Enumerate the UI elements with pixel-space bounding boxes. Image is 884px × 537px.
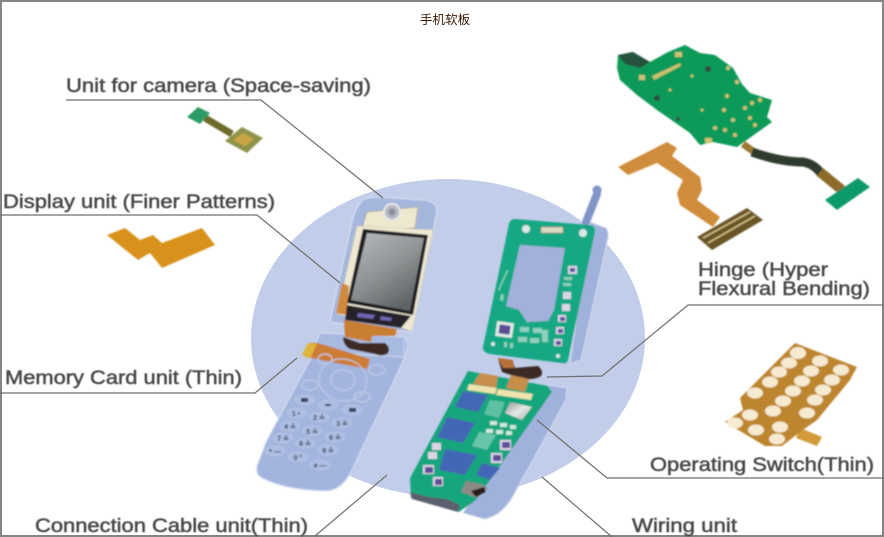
phone top housing	[330, 197, 437, 332]
small purple components	[423, 440, 511, 486]
LCD driver	[345, 305, 411, 328]
photo: orange hinge flex	[618, 142, 763, 250]
product photos	[107, 45, 870, 446]
board pads	[498, 270, 572, 348]
board connector	[541, 227, 563, 233]
memory card flex	[302, 343, 370, 369]
blue chips	[437, 391, 500, 480]
photo: camera flex	[187, 107, 263, 153]
keypad keys: 9 ≟	[322, 446, 334, 455]
hinge covers	[312, 333, 405, 357]
board screw holes	[491, 225, 587, 358]
label: display: Display unit (Finer Patterns)	[3, 192, 275, 213]
keypad keys: 5 ≟	[306, 427, 318, 436]
keypad keys: 8 ≟	[299, 439, 311, 448]
keypad keys: # —	[314, 463, 326, 470]
photo: operating switch	[725, 343, 857, 446]
upper circuit board	[483, 219, 595, 363]
label: hinge line 2: Flexural Bending)	[698, 279, 870, 300]
background circle	[251, 179, 645, 497]
hinge dark flex	[343, 337, 389, 356]
keypad keys: * —	[269, 449, 281, 456]
keypad keys: 4 ≟	[284, 422, 296, 431]
memory pads grid	[472, 400, 516, 450]
lower housing	[463, 385, 567, 519]
label: operating switch: Operating Switch(Thin)	[650, 455, 874, 476]
board window	[506, 245, 565, 322]
LCD screen	[347, 229, 428, 315]
antenna	[586, 186, 602, 222]
photo: green phone PCB	[617, 45, 870, 210]
photo: display flex	[107, 228, 215, 268]
camera module	[361, 204, 418, 232]
phone main upper housing	[570, 222, 608, 364]
board chip	[495, 321, 514, 338]
lower circuit board	[410, 371, 552, 512]
hinge cable	[498, 358, 542, 379]
display flex	[344, 320, 397, 342]
display unit orange flex	[336, 283, 352, 316]
navigation ring	[302, 354, 385, 405]
label: wiring unit: Wiring unit	[632, 516, 738, 537]
phone keypad housing	[257, 333, 408, 491]
keypad keys	[265, 395, 362, 470]
label: hinge line 1: Hinge (Hyper	[698, 260, 829, 281]
keypad keys: 0 °	[294, 454, 303, 462]
keypad keys: 2 ≟	[313, 413, 325, 422]
keypad keys: 3 ≟	[336, 419, 348, 428]
board connectors	[473, 373, 529, 392]
title: 手机软板	[420, 13, 471, 27]
bottom connector	[410, 492, 460, 512]
keypad keys: 6 ≟	[329, 433, 341, 442]
label: camera: Unit for camera (Space-saving)	[66, 76, 371, 97]
open flip phone	[257, 186, 608, 519]
label: connection cable: Connection Cable unit(Thin)	[35, 516, 308, 537]
keypad keys: 1 •	[292, 411, 301, 418]
label: memory card: Memory Card unit (Thin)	[5, 368, 242, 389]
keypad keys: 7 ≟	[277, 434, 289, 443]
display board	[337, 226, 433, 331]
